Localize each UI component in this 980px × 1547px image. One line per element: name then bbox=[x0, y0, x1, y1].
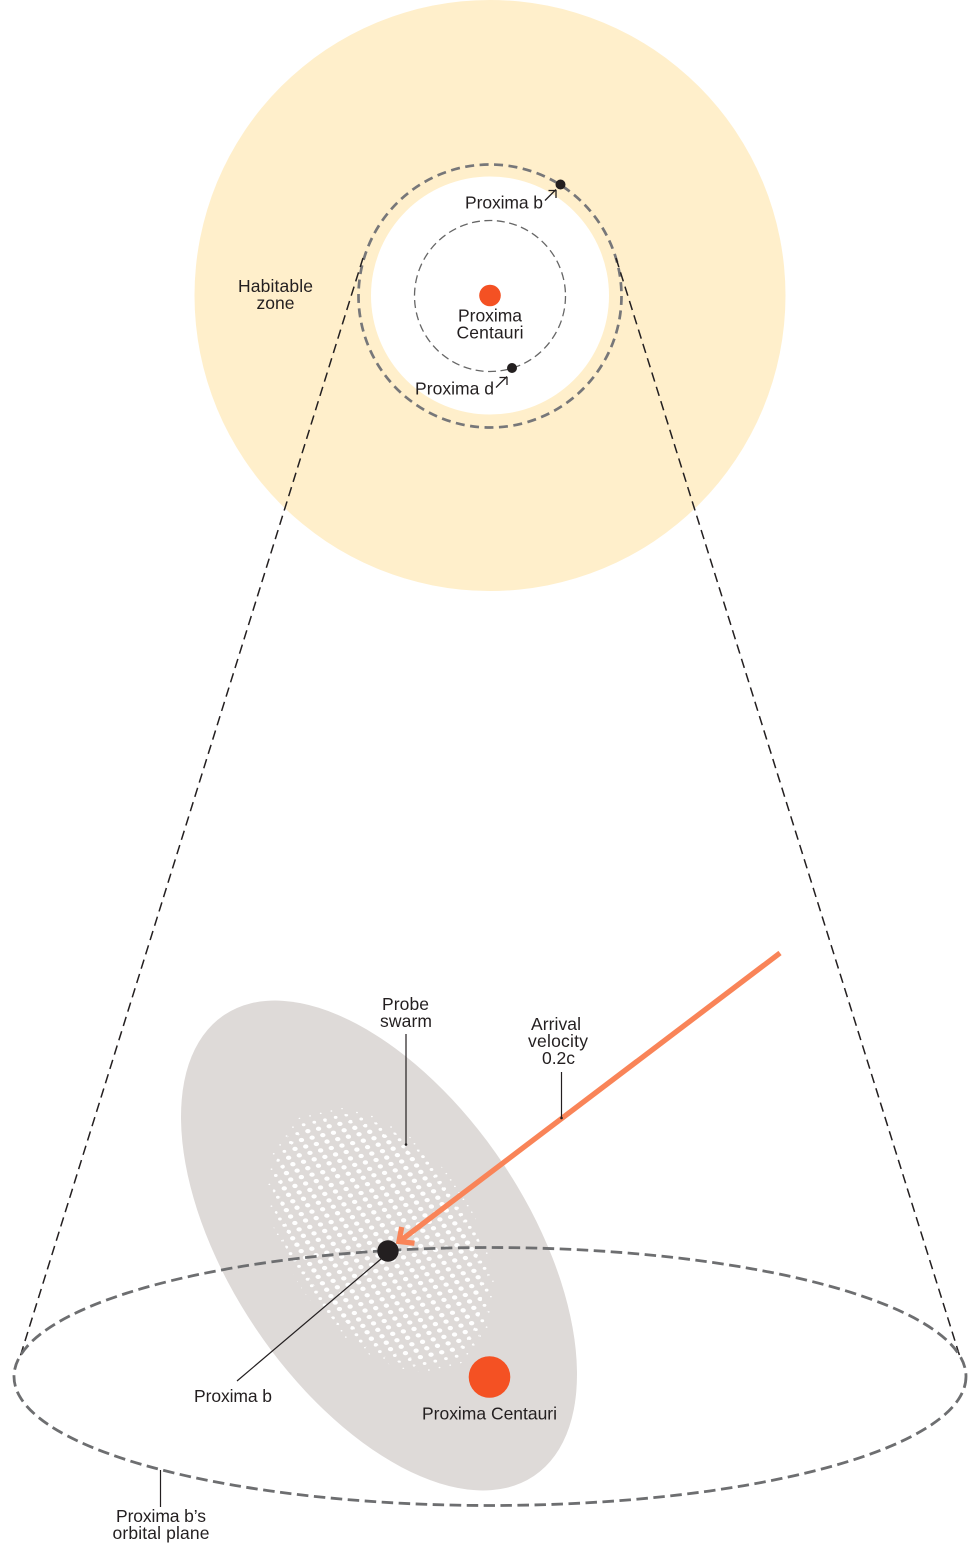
leader: orbital plane bbox=[160, 1470, 162, 1507]
arrow: Proxima d bbox=[496, 376, 507, 388]
label: Proxima b (top): Proxima b bbox=[465, 192, 543, 212]
leader: Proxima b (bottom) bbox=[237, 1259, 381, 1381]
leader: probe swarm bbox=[405, 1034, 407, 1146]
label: habitable zone: Habitable bbox=[238, 276, 313, 296]
star: Proxima Centauri (bottom) bbox=[469, 1356, 510, 1398]
label: habitable zone: zone bbox=[256, 293, 294, 313]
arrow: Proxima b bbox=[545, 190, 556, 200]
label: Proxima Centauri (top) bbox=[456, 306, 524, 342]
label: probe swarm: Probe bbox=[382, 994, 429, 1014]
planet: Proxima d bbox=[507, 363, 517, 373]
label: arrival velocity: Arrival bbox=[531, 1014, 581, 1034]
label: Proxima Centauri (bottom): Proxima Centauri bbox=[422, 1404, 557, 1424]
star: Proxima Centauri (top) bbox=[479, 285, 501, 306]
label: arrival velocity: velocity bbox=[528, 1031, 588, 1051]
arrow: arrival velocity bbox=[399, 953, 780, 1243]
orbital plane ellipse bbox=[14, 1248, 966, 1506]
label: probe swarm bbox=[380, 994, 432, 1031]
label: habitable zone bbox=[238, 276, 313, 313]
label: orbital plane: orbital plane bbox=[112, 1523, 210, 1543]
planet: Proxima b (top) bbox=[556, 180, 566, 190]
label: probe swarm: swarm bbox=[380, 1011, 432, 1031]
inner clear zone bbox=[371, 176, 609, 414]
habitable zone disc bbox=[194, 0, 786, 591]
label: Proxima b (bottom): Proxima b bbox=[194, 1386, 272, 1406]
orbit: Proxima b bbox=[358, 164, 622, 428]
probe swarm dots bbox=[268, 1108, 494, 1372]
label: orbital plane bbox=[112, 1506, 210, 1543]
label: orbital plane: Proxima b’s bbox=[116, 1506, 206, 1526]
leader: arrival velocity bbox=[560, 1072, 563, 1119]
planet: Proxima b (bottom) bbox=[377, 1240, 399, 1262]
orbit: Proxima d bbox=[414, 220, 566, 372]
grey beam footprint ellipse bbox=[101, 932, 657, 1547]
label: Proxima Centauri (top): Proxima bbox=[458, 306, 522, 326]
label: arrival velocity bbox=[528, 1014, 588, 1068]
label: Proxima Centauri (top): Centauri bbox=[456, 322, 524, 342]
cone line: right bbox=[616, 258, 960, 1357]
cone line: left bbox=[20, 258, 363, 1357]
label: arrival velocity: 0.2c bbox=[542, 1048, 575, 1068]
label: Proxima d: Proxima d bbox=[415, 378, 494, 398]
